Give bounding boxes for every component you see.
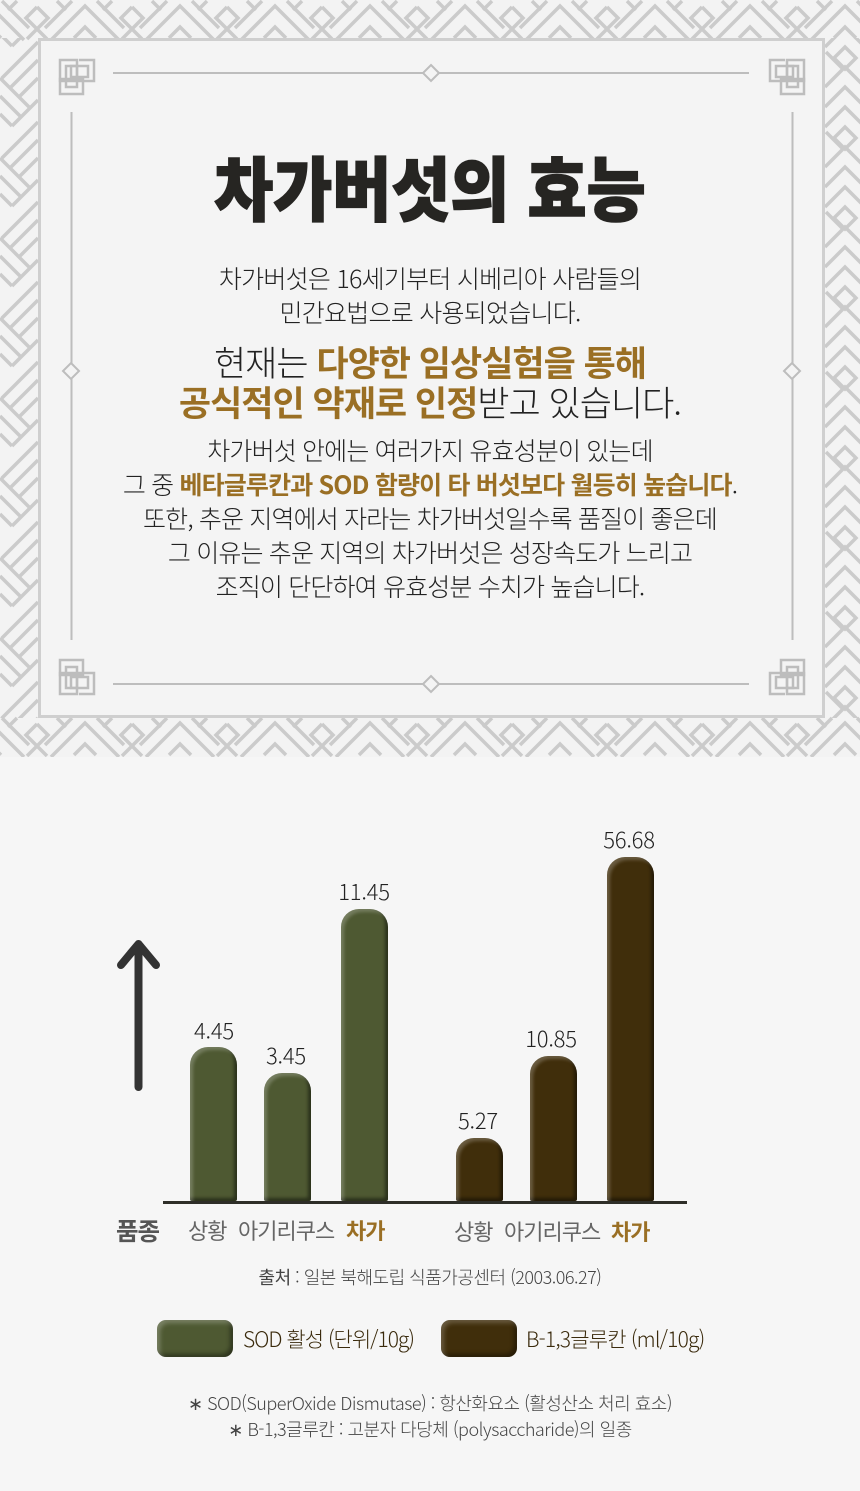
ornaments: corner knots, rules and diamonds: [58, 58, 806, 696]
footnotes: ∗ SOD(SuperOxide Dismutase) : 항산화요소 (활성산소 처리 효소): [188, 1390, 672, 1416]
text block: highlight statement: 공식적인 약재로 인정받고 있습니다.: [179, 376, 681, 427]
legend: [157, 1320, 704, 1357]
text block: details: 그 중 베타글루칸과 SOD 함량이 타 버섯보다 월등히 높습니다.: [123, 466, 737, 502]
bars: SOD group: 11.45: [338, 875, 390, 907]
axis labels: 아기리쿠스: [504, 1220, 600, 1245]
axis labels: 차가: [346, 1219, 384, 1244]
text block: intro: [219, 260, 641, 330]
text block: highlight statement: 현재는 다양한 임상실험을 통해: [214, 336, 646, 387]
legend: SOD 활성 (단위/10g): [243, 1324, 414, 1354]
text block: details: 차가버섯 안에는 여러가지 유효성분이 있는데: [207, 432, 653, 468]
axis labels: 아기리쿠스: [238, 1219, 334, 1244]
text block: details: 그 이유는 추운 지역의 차가버섯은 성장속도가 느리고: [168, 534, 692, 570]
chart axis: [163, 1201, 687, 1204]
bars: glucan group: 10.85: [525, 1022, 577, 1054]
text block: details: 또한, 추운 지역에서 자라는 차가버섯일수록 품질이 좋은데: [143, 500, 717, 536]
patterned frame background: [0, 0, 860, 757]
text block: details: [123, 432, 737, 604]
bars: SOD group: 3.45: [266, 1039, 306, 1071]
bars: SOD group: 4.45: [194, 1014, 234, 1046]
legend: B-1,3글루칸 (ml/10g): [526, 1324, 704, 1354]
text block: details: 조직이 단단하여 유효성분 수치가 높습니다.: [216, 568, 644, 604]
text block: intro: 민간요법으로 사용되었습니다.: [279, 294, 581, 330]
footnotes: [188, 1390, 672, 1442]
text block: intro: 차가버섯은 16세기부터 시베리아 사람들의: [219, 260, 641, 296]
icon: up arrow: [117, 940, 160, 1091]
axis labels: [116, 1219, 650, 1246]
panel: paper card: [38, 38, 825, 718]
axis labels: 차가: [611, 1220, 649, 1245]
axis labels: 상황: [454, 1220, 492, 1245]
bars: glucan group: 5.27: [458, 1104, 498, 1136]
bars: glucan group: 56.68: [603, 823, 655, 855]
text block: highlight statement: [179, 336, 681, 427]
source note: 출처 : 일본 북해도립 식품가공센터 (2003.06.27): [259, 1264, 601, 1290]
axis labels: 품종: [116, 1219, 159, 1246]
axis labels: 상황: [188, 1219, 226, 1244]
title: 차가버섯의 효능: [214, 152, 646, 230]
footnotes: ∗ B-1,3글루칸 : 고분자 다당체 (polysaccharide)의 일종: [228, 1416, 632, 1442]
